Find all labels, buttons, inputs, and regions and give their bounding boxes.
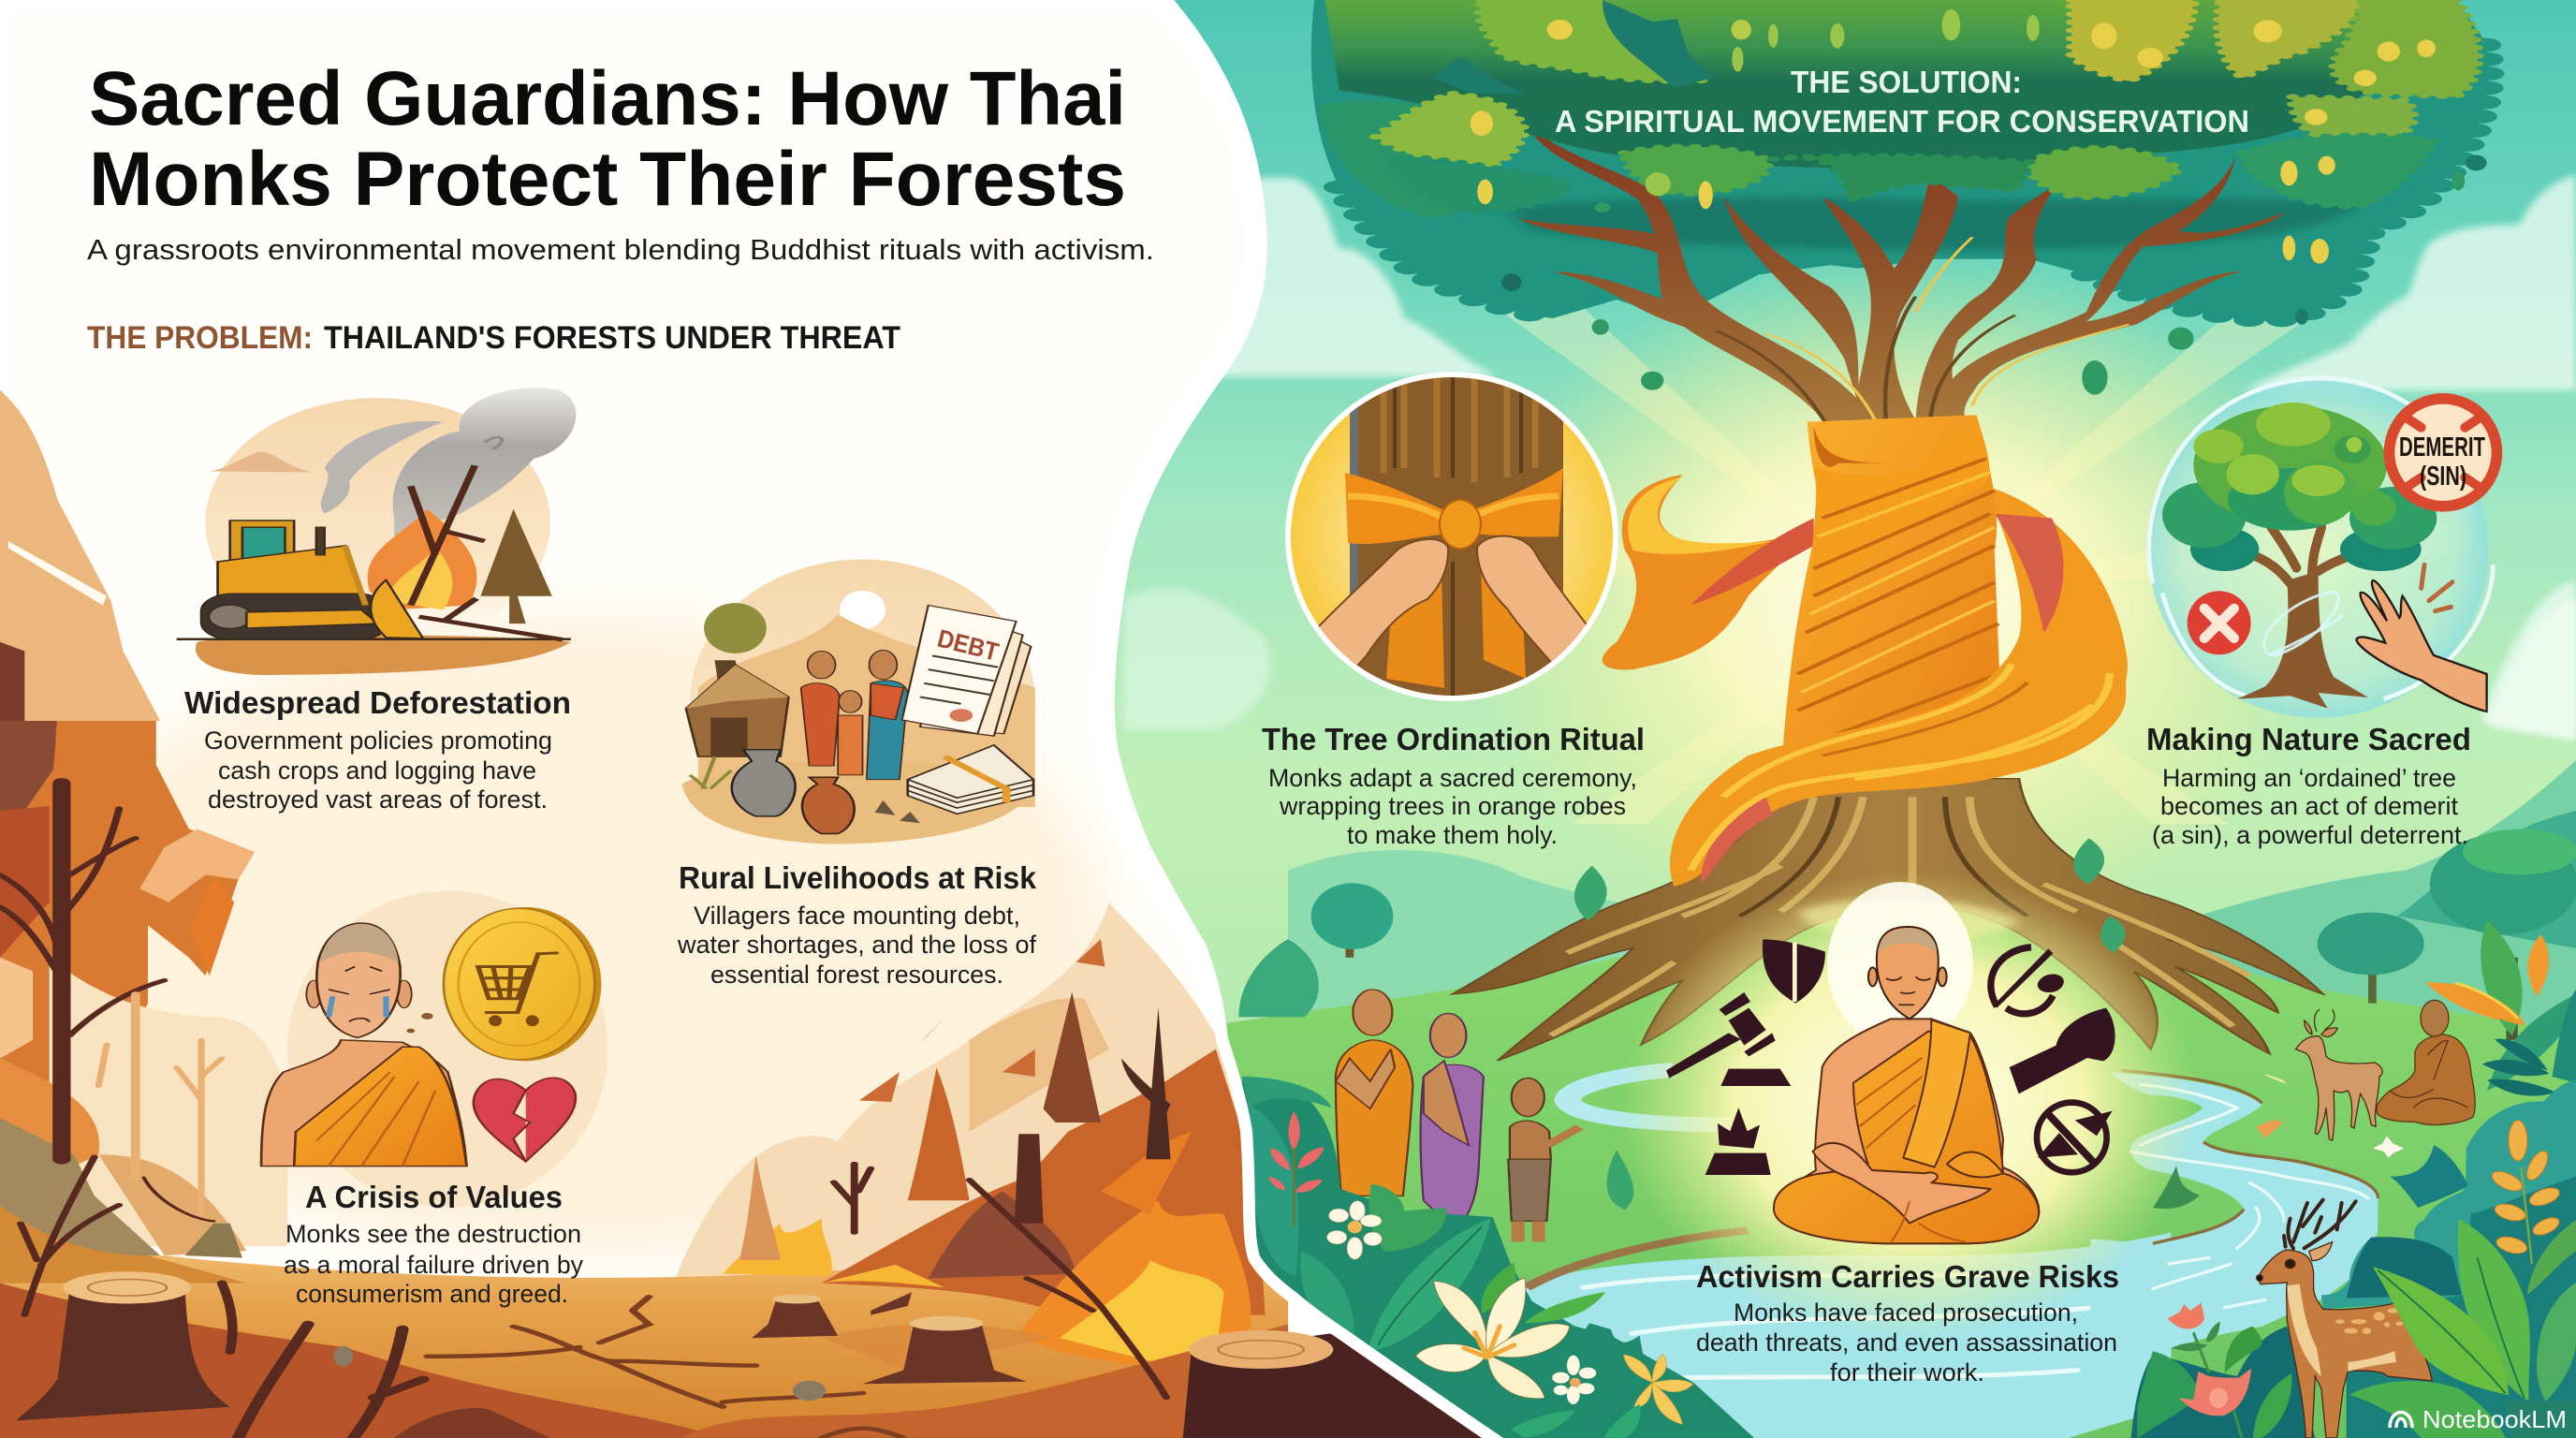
bottom red soil: [0, 1283, 723, 1438]
coral flowers: [2168, 1303, 2251, 1438]
heading: the problem: THE PROBLEM:: [87, 320, 313, 356]
monk in purple robe: [1421, 1013, 1484, 1228]
top light green leaf masses: [1375, 0, 2478, 213]
golden sprig: [2489, 1121, 2562, 1264]
money stack: [908, 745, 1033, 814]
inset: protected sacred tree: [2148, 377, 2502, 718]
child: [1508, 1078, 1580, 1241]
text block: making nature sacred: [2146, 722, 2471, 849]
icon: grieving monk, coin, broken heart: [261, 891, 607, 1208]
text block: tree ordination ritual: wrapping trees in orange robes: [1279, 792, 1626, 820]
dead trees: [0, 784, 1166, 1438]
text block: activism carries grave risks: Activism Carries Grave Risks: [1696, 1259, 2119, 1294]
monk body: [1774, 1019, 2039, 1243]
smoke: [321, 388, 576, 536]
dark branch-like leaf gaps: [1603, 0, 1713, 87]
text block: crisis of values: as a moral failure driven by: [284, 1251, 583, 1279]
tree canopy base: [1311, 0, 2489, 321]
red plant: [1268, 1111, 1325, 1193]
icon: village and debt: [681, 560, 1035, 844]
text block: widespread deforestation: Government policies promoting: [204, 726, 552, 755]
hands: [1318, 538, 1449, 667]
bottom left dark foliage: [2131, 1327, 2315, 1438]
hut: [686, 665, 788, 756]
water pots: [732, 750, 796, 816]
large leaves: [2458, 1219, 2530, 1401]
green ground hill: [1140, 904, 2576, 1438]
plumeria flower: [1415, 1278, 1570, 1399]
fire: [368, 509, 476, 609]
text block: making nature sacred: becomes an act of demerit: [2160, 792, 2458, 820]
monk with hands together: [1336, 990, 1412, 1196]
inset: tying the robe around a tree: [1285, 372, 1618, 701]
text block: activism carries grave risks: Monks have faced prosecution,: [1734, 1299, 2078, 1327]
tree canopy foliage: [1325, 0, 2487, 395]
foreground foliage and flowers left: [1242, 1077, 1754, 1438]
tree roots: [1453, 779, 2323, 1061]
debt document: [902, 606, 1031, 736]
flames: [723, 1219, 832, 1276]
heading: the problem: THAILAND'S FORESTS UNDER THREAT: [324, 320, 900, 356]
burned spiky trees: [739, 1067, 970, 1260]
ground: [0, 1200, 1288, 1438]
foreground deer: [2257, 1242, 2432, 1438]
river pool: [1493, 1070, 2171, 1438]
text block: crisis of values: [284, 1180, 583, 1308]
icon: bulldozer and burning forest: [177, 388, 576, 675]
text block: activism carries grave risks: death threats, and even assassination: [1696, 1328, 2117, 1357]
pine: [480, 509, 552, 624]
yellow flower: [1623, 1355, 1693, 1425]
clouds: [1123, 175, 2576, 740]
title: Sacred Guardians: How Thai: [89, 56, 1126, 141]
top right dark leaves and orange bloom: [2443, 983, 2576, 1096]
text block: rural livelihoods: Rural Livelihoods at Risk: [679, 860, 1037, 895]
text block: tree ordination ritual: The Tree Ordination Ritual: [1262, 722, 1645, 756]
demerit sign label: DEMERIT: [2399, 433, 2485, 462]
monk head: [1868, 927, 1947, 1019]
text block: crisis of values: Monks see the destruction: [285, 1220, 581, 1248]
title: [89, 56, 1126, 222]
bow: [1345, 468, 1563, 544]
text block: making nature sacred: Harming an ‘ordained’ tree: [2162, 764, 2456, 792]
text block: activism carries grave risks: [1696, 1259, 2119, 1387]
text block: making nature sacred: (a sin), a powerful deterrent.: [2152, 821, 2468, 849]
bulldozer: [201, 521, 423, 639]
dirt: [196, 635, 571, 675]
panel: solution scene: [1076, 0, 2576, 1438]
small white flower: [1326, 1201, 1382, 1259]
demerit sign label: [2399, 433, 2485, 492]
text block: widespread deforestation: [184, 685, 571, 814]
text block: making nature sacred: Making Nature Sacred: [2146, 722, 2471, 756]
meadow flowers: [2153, 1074, 2404, 1209]
text block: crisis of values: A Crisis of Values: [305, 1180, 563, 1214]
tree branches and trunk: [1517, 119, 2286, 431]
risk icons: gavel, shield, no-sign, fist, flame, ban: [1666, 939, 2115, 1175]
dark band behind heading: [1325, 0, 2371, 168]
tan cliff upper left: [0, 389, 160, 721]
heading: the solution: THE SOLUTION:: [1791, 65, 2022, 99]
text block: rural livelihoods: essential forest resources.: [710, 961, 1003, 989]
protected tree: [2162, 403, 2437, 709]
illustration: monks and child on left bank: [1336, 990, 1580, 1241]
demerit sign label: (SIN): [2420, 462, 2466, 492]
teal bush: [2321, 1079, 2576, 1438]
panel: the problem (white left side): [0, 0, 1560, 1438]
text block: tree ordination ritual: to make them holy.: [1347, 821, 1558, 849]
debt label: DEBT: [935, 624, 1002, 667]
broken heart: [474, 1078, 576, 1162]
red X mark: [2188, 591, 2251, 654]
small lower flower: [1552, 1356, 1596, 1404]
background trees: [1238, 829, 2576, 1040]
seated monk: [2377, 1000, 2475, 1124]
upper right plants and ferns: [1574, 838, 2576, 1210]
orange robe wrapped around trunk: [1603, 415, 2128, 887]
burned forest landscape: [0, 389, 1560, 1438]
illustration: central meditating monk: [1619, 871, 2200, 1339]
text block: activism carries grave risks: for their work.: [1830, 1358, 1984, 1387]
foreground cloud right: [2485, 599, 2576, 740]
foreground lower right: deer, monk, plants: [2131, 983, 2576, 1438]
NotebookLM watermark: NotebookLM: [2422, 1405, 2567, 1433]
heading: the solution: A SPIRITUAL MOVEMENT FOR CONSERVATION: [1555, 104, 2249, 139]
text block: rural livelihoods: Villagers face mounting debt,: [694, 902, 1020, 930]
text block: rural livelihoods: [677, 860, 1037, 989]
text block: widespread deforestation: destroyed vast areas of forest.: [208, 785, 548, 814]
orange hills: [822, 1049, 1266, 1315]
leaves: [1471, 20, 2436, 264]
text block: widespread deforestation: cash crops and logging have: [218, 756, 536, 785]
text block: tree ordination ritual: Monks adapt a sacred ceremony,: [1268, 764, 1637, 792]
text block: crisis of values: consumerism and greed.: [296, 1280, 568, 1308]
left rocks and cliffs: [0, 714, 255, 1113]
text block: tree ordination ritual: [1262, 722, 1645, 849]
heading: the solution: [1555, 65, 2249, 139]
sun rays behind tree: [1329, 281, 2471, 824]
tails: [1386, 580, 1444, 688]
demerit sign: [2384, 393, 2502, 512]
stumps: [17, 1271, 1560, 1438]
pale distant ridge right: [674, 902, 1257, 1292]
title: Monks Protect Their Forests: [89, 137, 1126, 222]
lower right meandering river: [2090, 1070, 2378, 1357]
stopping hand: [2356, 565, 2487, 712]
text block: widespread deforestation: Widespread Deforestation: [184, 685, 571, 720]
small deer: [2296, 1009, 2382, 1140]
villagers: [801, 651, 908, 780]
text block: rural livelihoods: water shortages, and the loss of: [677, 931, 1036, 959]
shopping cart coin: [444, 907, 601, 1061]
subtitle: A grassroots environmental movement blending Buddhist rituals with activism.: [87, 233, 1154, 266]
dead tree and logs: [411, 465, 563, 639]
distant hills: [1288, 760, 2576, 1067]
heading: the problem: [87, 320, 900, 356]
